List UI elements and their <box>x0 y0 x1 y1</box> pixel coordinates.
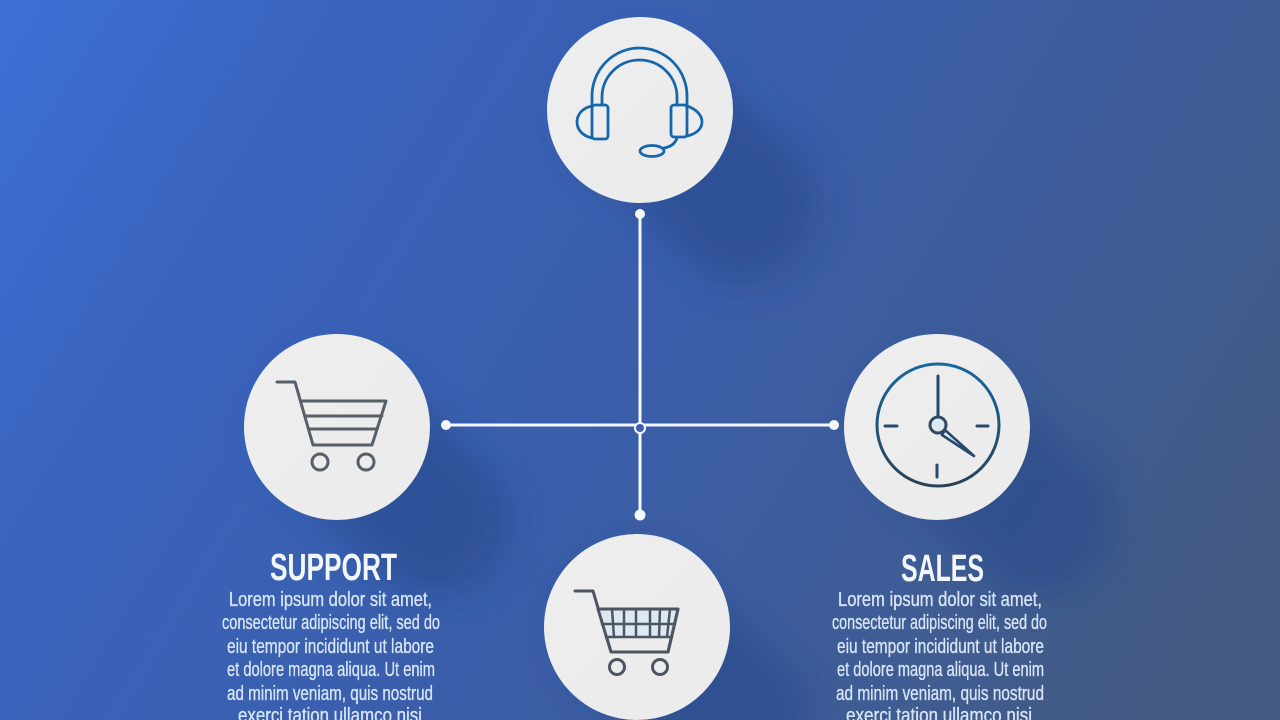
body: support description: eiu tempor incididunt ut labore <box>227 636 434 658</box>
text block: support <box>222 547 440 720</box>
icon: grid cart <box>575 591 678 674</box>
node: shopping cart (left) <box>244 334 430 520</box>
body: sales description: et dolore magna aliqua. Ut enim <box>837 659 1044 681</box>
heading: support: SUPPORT <box>270 547 397 589</box>
body: support description: et dolore magna aliqua. Ut enim <box>227 659 435 681</box>
body: sales description: eiu tempor incididunt ut labore <box>837 636 1044 658</box>
body: sales description: ad minim veniam, quis nostrud <box>836 683 1044 705</box>
body: support description <box>222 589 440 720</box>
icon: headset <box>577 48 702 156</box>
node: clock <box>844 334 1030 520</box>
connector lines <box>441 209 839 520</box>
heading: sales: SALES <box>901 548 984 590</box>
long shadows <box>342 115 1040 720</box>
node: headset <box>547 17 733 203</box>
body: sales description <box>832 589 1047 720</box>
icon: clock <box>877 364 999 486</box>
text block: sales <box>832 548 1047 720</box>
body: sales description: Lorem ipsum dolor sit amet, <box>838 589 1042 611</box>
icon: shopping cart <box>277 382 386 470</box>
node: shopping basket cart (bottom) <box>544 534 730 720</box>
body: support description: ad minim veniam, quis nostrud <box>227 683 433 705</box>
body: support description: Lorem ipsum dolor sit amet, <box>229 589 432 611</box>
body: support description: consectetur adipiscing elit, sed do <box>222 612 440 634</box>
body: sales description: consectetur adipiscing elit, sed do <box>832 612 1047 634</box>
